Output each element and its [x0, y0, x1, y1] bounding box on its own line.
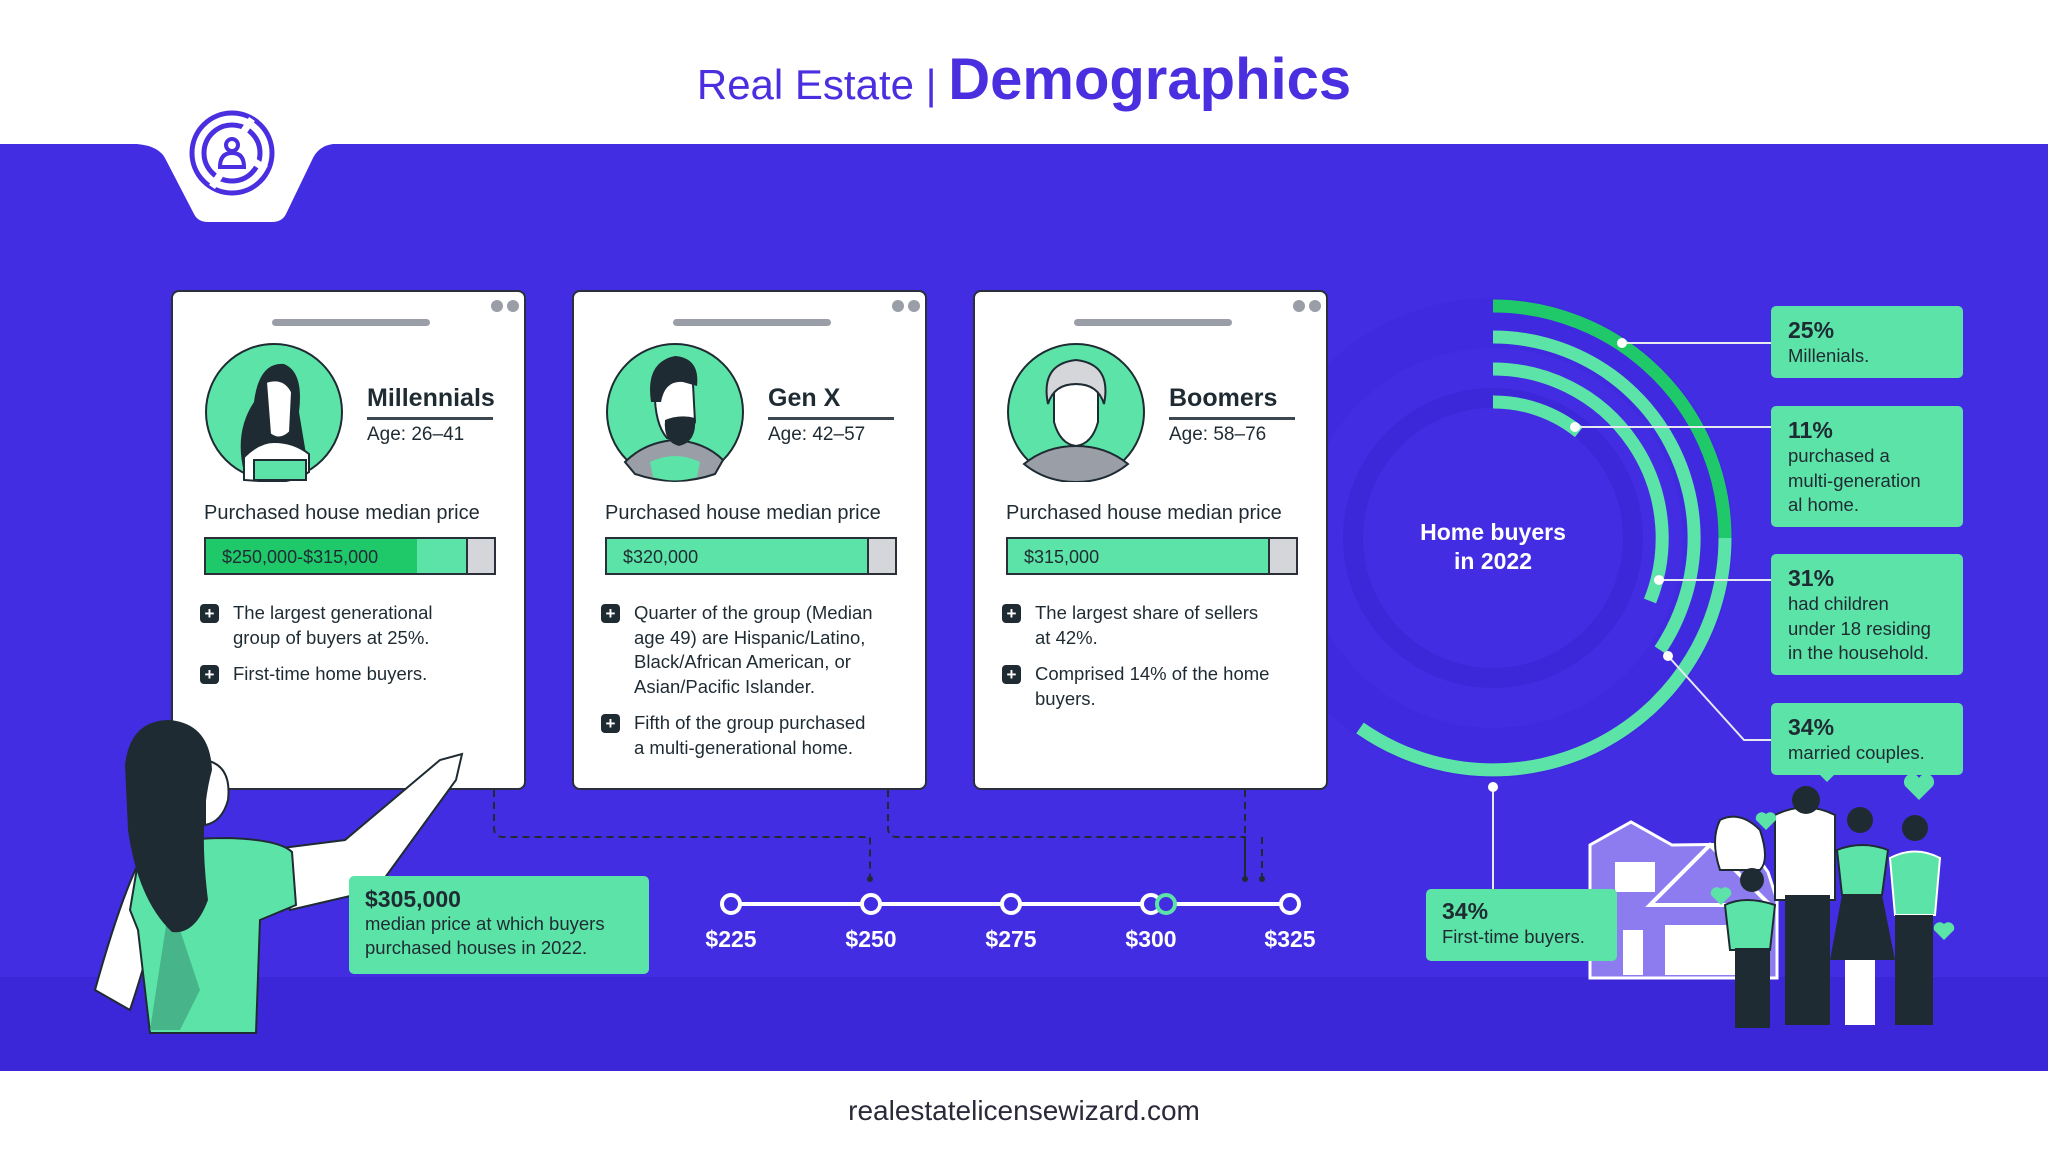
callout: median price: median price at which buyers [365, 913, 605, 934]
card: Boomers: Comprised 14% of the home [1035, 663, 1269, 684]
radial chart: home buyers: in 2022 [1454, 548, 1532, 574]
callout: median price [349, 876, 649, 974]
stat boxes: Millenials. [1788, 345, 1869, 366]
text: under 18 residing [1788, 618, 1931, 638]
avatar: millennial woman [205, 343, 343, 482]
text: $275 [985, 926, 1037, 952]
card: Boomers: + [1007, 665, 1016, 684]
card: Millennials: Millennials [367, 384, 495, 412]
text: $325 [1264, 926, 1316, 952]
text: married couples. [1788, 742, 1925, 763]
card: Boomers [973, 290, 1328, 790]
text: multi-generation [1788, 470, 1921, 490]
footer url: realestatelicensewizard.com [848, 1095, 1200, 1126]
card: Millennials: Purchased house median price [204, 502, 480, 524]
text: $300 [1125, 926, 1177, 952]
callout: median price: $305,000 [365, 886, 461, 912]
bullets: + [1007, 604, 1016, 623]
text: al home. [1788, 494, 1859, 515]
callout: first-time buyers [1426, 889, 1617, 961]
card: Gen X: Age: 42–57 [768, 424, 865, 445]
illustration: pointing woman [94, 720, 464, 1034]
card: Gen X: Gen X [768, 384, 840, 412]
bullets [200, 602, 433, 648]
text: 34% [1788, 714, 1834, 740]
card: Gen X: a multi-generational home. [634, 736, 853, 758]
stat boxes: 25% [1788, 317, 1834, 343]
card: Millennials: + [205, 665, 214, 684]
card: Gen X: $320,000 [623, 547, 698, 567]
card: Boomers: $315,000 [1024, 547, 1099, 567]
stat boxes [1771, 306, 1963, 378]
logo icon [190, 110, 274, 196]
card: Millennials: Age: 26–41 [367, 424, 464, 445]
callout: median price: purchased houses in 2022. [365, 937, 587, 958]
card: Millennials [171, 290, 526, 790]
text: in the household. [1788, 642, 1929, 663]
text: 11% [1788, 417, 1833, 443]
text: $225 [705, 926, 757, 952]
bullets [1002, 602, 1258, 648]
bullets: + [606, 604, 615, 623]
bullets: at 42%. [1035, 626, 1098, 648]
card: Boomers: Boomers [1169, 384, 1277, 412]
card: Gen X: + [606, 714, 615, 733]
card: Boomers: Purchased house median price [1006, 502, 1282, 524]
avatar: older woman [1007, 343, 1145, 482]
bullets: Asian/Pacific Islander. [634, 676, 815, 696]
bullets: age 49) are Hispanic/Latino, [634, 626, 865, 648]
callout: first-time buyers: 34% [1442, 898, 1488, 924]
bullets [601, 602, 873, 696]
text: had children [1788, 593, 1889, 614]
timeline labels [705, 926, 1316, 952]
bullets: Black/African American, or [634, 651, 851, 672]
illustration: house and family [1588, 775, 1954, 1028]
card: Gen X [572, 290, 927, 790]
radial chart: home buyers: Home buyers [1420, 519, 1566, 545]
card: Gen X: Fifth of the group purchased [634, 712, 865, 733]
bullets: + [205, 604, 214, 623]
callout: first-time buyers: First-time buyers. [1442, 926, 1585, 947]
card: Boomers: buyers. [1035, 688, 1096, 708]
bullets: The largest generational [233, 602, 433, 623]
bullets: Quarter of the group (Median [634, 602, 873, 623]
text: purchased a [1788, 445, 1890, 466]
bullets: group of buyers at 25%. [233, 626, 429, 648]
avatar: bearded man [606, 343, 744, 482]
text: $250 [845, 926, 897, 952]
card: Millennials: First-time home buyers. [233, 663, 427, 684]
bullets: The largest share of sellers [1035, 602, 1258, 623]
card: Boomers: Age: 58–76 [1169, 424, 1266, 445]
card: Millennials: $250,000-$315,000 [222, 547, 378, 567]
text: 31% [1788, 565, 1834, 591]
header title: Real Estate | Demographics [697, 47, 1351, 112]
card: Gen X: Purchased house median price [605, 502, 881, 524]
